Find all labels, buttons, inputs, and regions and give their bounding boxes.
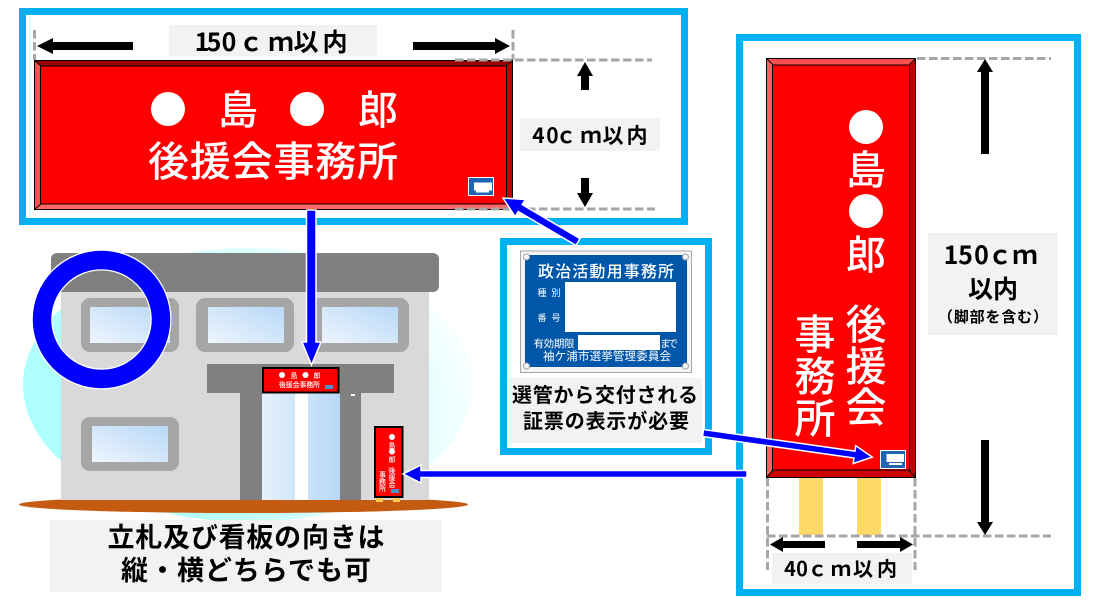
horizontal sign board: 後援会事務所 xyxy=(148,128,398,188)
certificate plate: まで xyxy=(660,336,678,351)
entrance xyxy=(207,364,394,500)
horizontal sign board: 郎 xyxy=(358,78,398,136)
building body xyxy=(61,290,429,500)
vertical sign board: 郎 xyxy=(846,223,886,281)
vertical sign board xyxy=(766,58,916,478)
panel: certificate xyxy=(504,242,708,452)
mini vertical sign: 会 xyxy=(388,480,396,490)
vertical sign board: 島 xyxy=(846,138,886,196)
mini horizontal sign xyxy=(263,368,338,392)
mini vertical sign: 務 xyxy=(379,477,386,487)
mini vertical sign: 所 xyxy=(379,484,386,494)
certificate caption: 証票の表示が必要 xyxy=(523,405,689,434)
horizontal sign board: 島 xyxy=(218,78,258,136)
width label: 150ｃｍ以内 xyxy=(195,23,348,59)
vertical sign board: 会 xyxy=(846,374,886,434)
roof xyxy=(51,253,439,292)
panel: horizontal sign xyxy=(22,12,684,222)
panel: vertical sign xyxy=(740,38,1078,592)
icon: certificate plate xyxy=(880,450,906,469)
icon: blue circle OK mark xyxy=(42,260,161,379)
sign legs xyxy=(799,478,881,535)
height label xyxy=(928,233,1058,335)
arrow: vertical sign to building xyxy=(403,465,747,483)
mini vertical sign: 事 xyxy=(379,470,386,480)
vertical sign board: 務 xyxy=(794,343,836,403)
vertical sign board: 事 xyxy=(794,301,836,361)
mini horizontal sign: 島 xyxy=(290,371,298,381)
width label: 40ｃｍ以内 xyxy=(784,553,897,582)
mini horizontal sign: 後援会事務所 xyxy=(279,380,320,390)
illustration: building xyxy=(19,248,473,522)
vertical sign board: 所 xyxy=(794,385,836,445)
certificate plate: 政治活動用事務所 xyxy=(538,258,674,282)
mini vertical sign: 島 xyxy=(388,441,396,451)
windows xyxy=(81,298,409,471)
certificate caption xyxy=(509,378,702,443)
horizontal sign board xyxy=(34,60,513,210)
arrow: horizontal sign to building xyxy=(302,210,321,365)
height label: 以内 xyxy=(968,270,1018,306)
vertical sign board: 援 xyxy=(846,333,886,393)
mini horizontal sign: 郎 xyxy=(314,371,320,381)
height label: （脚部を含む） xyxy=(938,306,1048,327)
certificate plate: 有効期限 xyxy=(534,336,575,351)
caption: orientation note xyxy=(50,516,442,592)
width dimension arrows xyxy=(34,30,513,60)
arrow: certificate to horizontal sign xyxy=(498,189,583,251)
mini vertical sign: 援 xyxy=(388,473,396,483)
icon: certificate plate xyxy=(468,177,494,196)
caption: orientation note: 縦・横どちらでも可 xyxy=(121,549,371,588)
ground xyxy=(19,496,468,513)
vertical sign board: 後 xyxy=(846,291,886,351)
certificate plate: 番 号 xyxy=(538,311,560,324)
height dimension xyxy=(767,58,1051,570)
height label: 150ｃｍ xyxy=(944,236,1038,272)
certificate plate xyxy=(520,251,692,372)
height label: 40ｃｍ以内 xyxy=(532,120,648,150)
mini vertical sign xyxy=(375,427,402,502)
arrow: certificate to vertical sign xyxy=(702,424,874,466)
mini vertical sign: 後 xyxy=(388,466,396,476)
height dimension xyxy=(455,60,655,209)
mini vertical sign: 郎 xyxy=(388,455,396,465)
caption: orientation note: 立札及び看板の向きは xyxy=(108,516,384,555)
certificate plate: 種 別 xyxy=(538,286,560,299)
certificate plate: 袖ケ浦市選挙管理委員会 xyxy=(543,348,672,364)
width dimension arrows xyxy=(770,537,913,552)
certificate caption: 選管から交付される xyxy=(512,379,698,408)
